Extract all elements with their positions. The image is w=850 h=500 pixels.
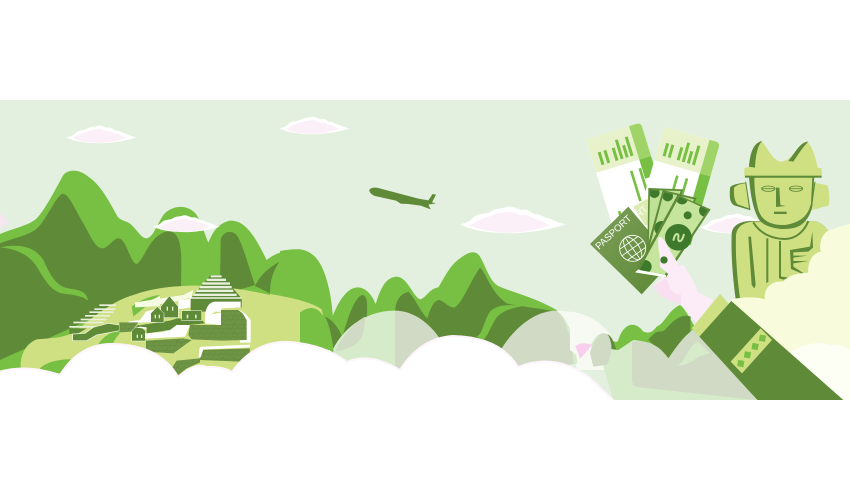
note front bbox=[635, 195, 711, 277]
statue body bbox=[731, 221, 829, 305]
statue bbox=[730, 141, 829, 305]
sleeve band bbox=[731, 328, 772, 373]
right distant hills behind hand bbox=[570, 305, 757, 400]
finger bbox=[658, 237, 678, 276]
passport cover bbox=[590, 207, 673, 294]
passport: RT bbox=[634, 204, 650, 221]
statue collar bbox=[753, 221, 808, 239]
terraces: left side bbox=[69, 296, 160, 347]
passport inner page bbox=[633, 198, 653, 225]
statue ears bbox=[730, 183, 750, 210]
hand: palm behind notes bbox=[653, 265, 713, 323]
passport bbox=[590, 198, 673, 294]
passport title: PASPORT bbox=[594, 213, 634, 252]
airplane bbox=[369, 188, 436, 209]
stone walls bbox=[221, 310, 247, 341]
sleeve bbox=[699, 301, 843, 400]
note middle bbox=[645, 190, 697, 270]
statue nose bbox=[776, 188, 786, 207]
tickets bbox=[586, 123, 720, 245]
white terrace walkways bbox=[205, 313, 221, 325]
cloud: over left range bbox=[153, 215, 220, 232]
ticket right bbox=[635, 127, 720, 245]
mountains: middle range bbox=[270, 249, 577, 370]
banknotes bbox=[635, 187, 711, 277]
passport globe bbox=[615, 230, 651, 266]
statue face bbox=[749, 177, 814, 229]
cuff bbox=[692, 294, 731, 337]
terraces: right side bbox=[135, 275, 251, 375]
statue eyes bbox=[762, 186, 803, 191]
sky background bbox=[0, 100, 850, 400]
houses bbox=[151, 296, 202, 322]
statue mouth bbox=[774, 212, 787, 214]
mountains: left range bbox=[0, 171, 300, 367]
cloud: behind tickets and statue bbox=[700, 214, 779, 234]
statue hat bbox=[744, 141, 822, 177]
note back bbox=[647, 188, 683, 257]
pale yellow cloud bbox=[727, 223, 850, 400]
translucent domes bbox=[333, 311, 610, 373]
hand and sleeve bbox=[658, 237, 843, 400]
right stepped pyramid bbox=[191, 275, 242, 312]
hillside bbox=[0, 286, 300, 393]
small clouds bbox=[0, 117, 566, 233]
ticket left bbox=[586, 123, 669, 232]
foreground white clouds bbox=[0, 336, 850, 500]
illustration: travel landscape bbox=[0, 100, 850, 400]
